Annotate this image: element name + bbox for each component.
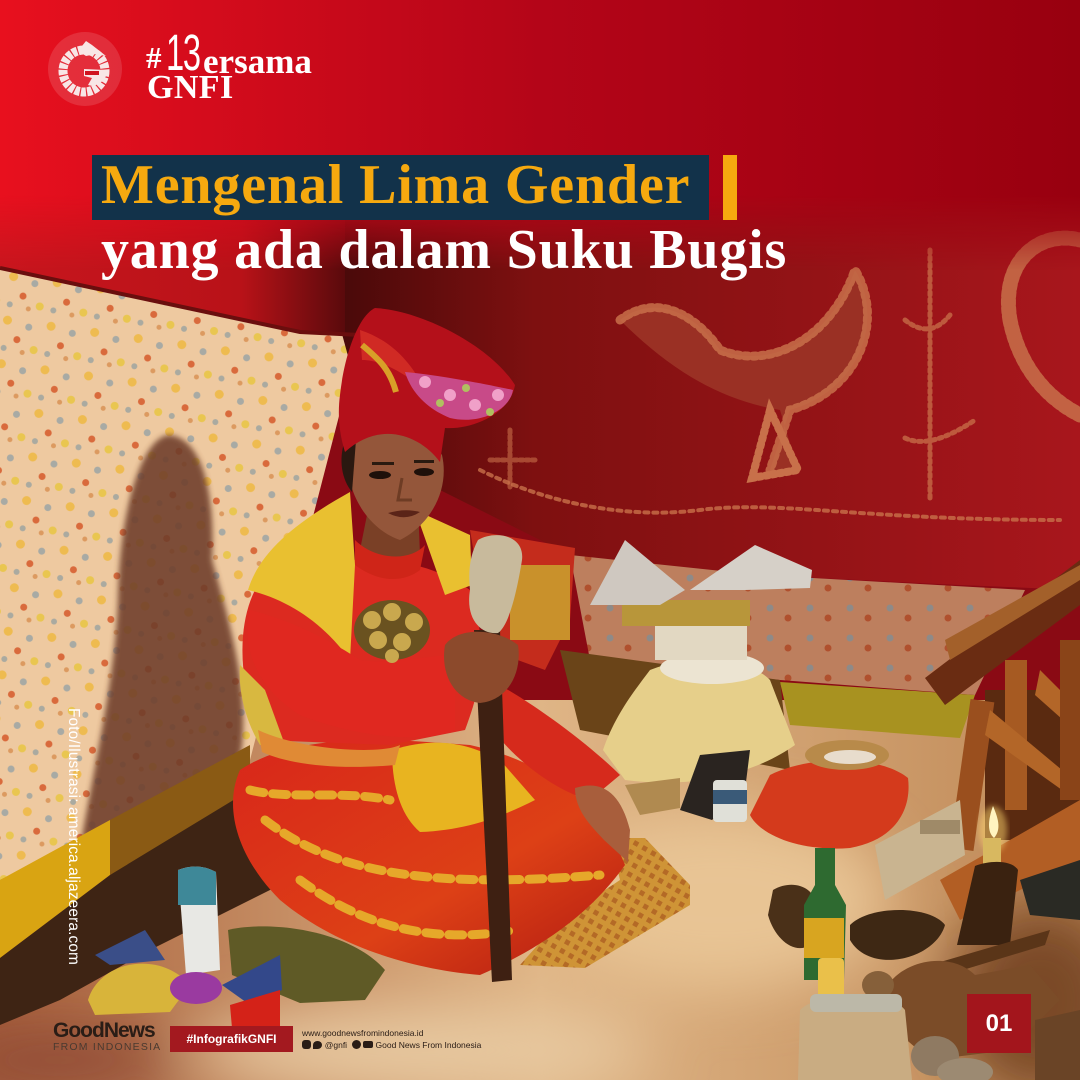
hand on staff	[444, 632, 519, 703]
campaign hashtag: ersama	[203, 42, 312, 81]
seated person	[233, 308, 630, 982]
page number box	[967, 994, 1031, 1053]
wall below tapestry	[570, 555, 1025, 695]
torso	[242, 560, 481, 745]
title line 1: Mengenal Lima Gender	[101, 154, 690, 216]
hair	[341, 440, 356, 492]
yellow wall hem	[0, 820, 110, 958]
offerings: bottle, bowls, stones, jar	[768, 848, 1080, 1080]
campaign hashtag: 13	[166, 24, 200, 81]
page number box: 01	[986, 1010, 1012, 1037]
dark floor corner	[0, 790, 290, 1025]
footer: GoodNews logo: GoodNews	[53, 1019, 155, 1042]
candle and flame	[957, 806, 1018, 945]
right tapestry and back wall	[300, 180, 1080, 590]
footer: hashtag label: #InfografikGNFI	[186, 1032, 276, 1046]
small items near basin	[625, 750, 750, 822]
title accent bar	[723, 155, 737, 220]
footer: website and social handles: www.goodnewsfromindonesia.id	[302, 1028, 423, 1038]
campaign hashtag: GNFI	[147, 69, 234, 106]
gold necklace	[354, 600, 430, 663]
footer: hashtag label	[170, 1026, 293, 1052]
floor	[0, 700, 1080, 1080]
footer: GoodNews logo	[53, 1019, 161, 1053]
campaign hashtag: #	[146, 40, 162, 75]
left yellow lower panel	[240, 665, 285, 745]
campaign hashtag	[146, 24, 312, 106]
wooden structure	[875, 560, 1080, 920]
forearm to knee	[490, 680, 620, 800]
robe skirt	[233, 740, 625, 975]
wall shadow of person	[78, 435, 243, 860]
face	[348, 429, 444, 540]
top red gradient and cloth band	[0, 180, 345, 335]
left floral wall	[0, 268, 360, 880]
title highlight box	[92, 155, 709, 220]
photo credit: Foto/Ilustrasi: america.aljazeera.com	[65, 708, 82, 965]
mat	[520, 838, 690, 968]
footer: website and social handles: @gnfi Good News From Indonesia	[325, 1040, 481, 1050]
orange belt	[258, 730, 400, 767]
red basin	[750, 740, 909, 849]
footer: website and social handles	[302, 1028, 482, 1050]
tapestry decoration: bird motif and vines	[480, 238, 1080, 520]
items at lower left	[88, 866, 385, 1028]
title line 2: yang ada dalam Suku Bugis	[101, 219, 787, 281]
footer: GoodNews logo: FROM INDONESIA	[53, 1041, 161, 1053]
gold embroidery	[250, 790, 600, 935]
goods: sack, boxes, paper	[470, 530, 812, 783]
logo badge	[48, 32, 122, 106]
neck and collar	[360, 505, 420, 562]
right arm	[247, 610, 455, 737]
walking staff	[474, 630, 512, 982]
yellow shawl	[248, 492, 355, 660]
red turban	[339, 308, 515, 462]
